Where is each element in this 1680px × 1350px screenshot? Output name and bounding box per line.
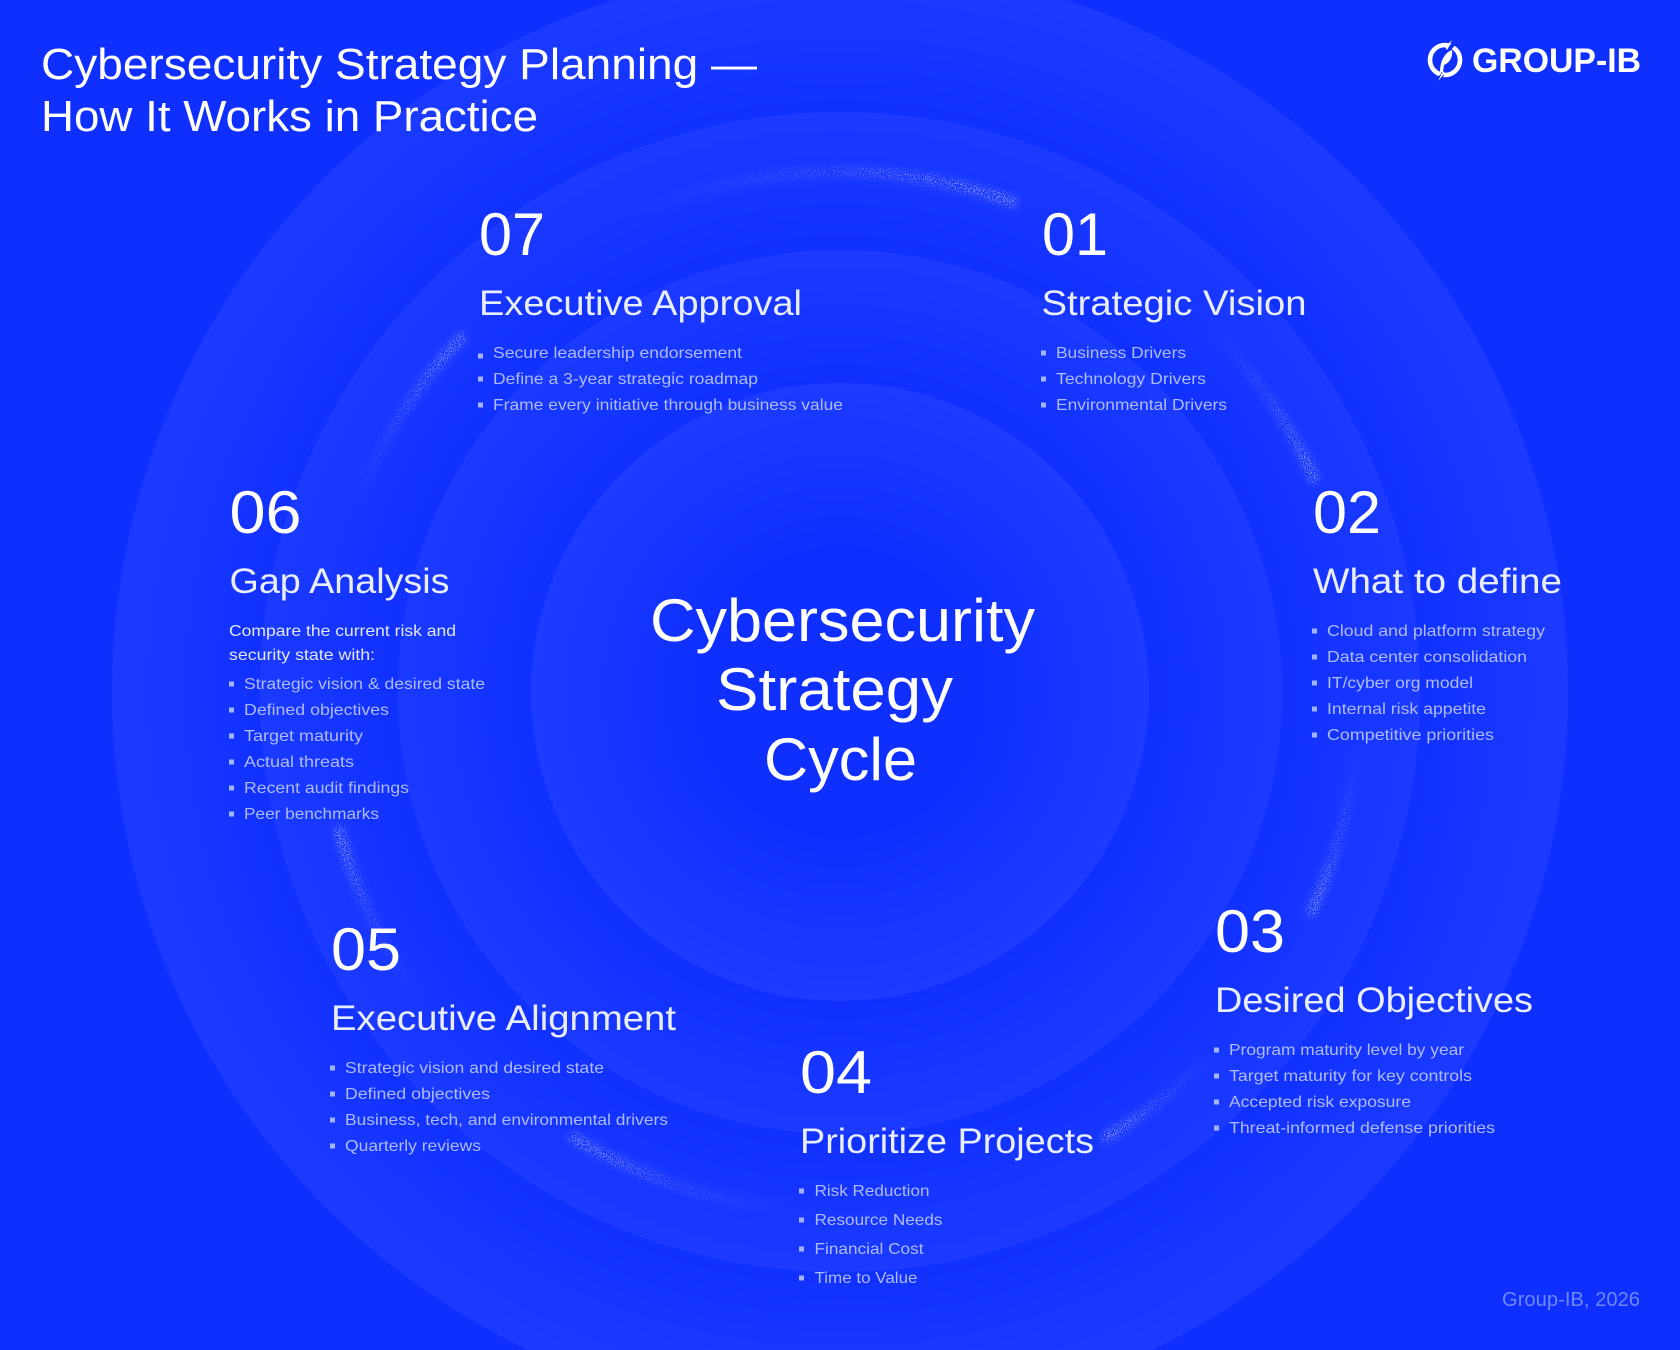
particle arcs of the cycle: [339, 172, 1358, 1210]
bullet list: Quarterly reviews: [345, 1138, 481, 1155]
step heading: Executive Approval: [479, 284, 802, 323]
bullet list: Strategic vision & desired state: [244, 676, 485, 693]
step number: 04: [800, 1039, 872, 1106]
panel: step 02: [1312, 479, 1562, 744]
arc: 03 to 04: [1107, 1050, 1216, 1137]
panel: step 04: [799, 1039, 1094, 1287]
step number: 03: [1215, 898, 1285, 965]
panel: step 06: [229, 479, 485, 823]
step heading: Gap Analysis: [230, 562, 450, 601]
bullet list: Frame every initiative through business value: [493, 397, 843, 414]
bullet list: Target maturity for key controls: [1229, 1068, 1472, 1085]
arc: 05 to 06: [339, 831, 424, 1004]
bullet list: Cloud and platform strategy: [1327, 623, 1545, 640]
step number: 02: [1313, 479, 1381, 546]
arc: 04 to 05: [574, 1138, 798, 1210]
step heading: Strategic Vision: [1042, 284, 1306, 323]
panel: step 05: [330, 916, 676, 1155]
bullet list: Resource Needs: [814, 1212, 942, 1229]
center label: [650, 587, 1035, 793]
step number: 06: [230, 479, 302, 546]
intro text: security state with:: [229, 647, 375, 664]
bullet list: Define a 3-year strategic roadmap: [493, 371, 758, 388]
bullet list: Secure leadership endorsement: [493, 345, 743, 362]
step number: 07: [479, 201, 545, 268]
bullet list: [478, 345, 843, 414]
arc: 01 to 02: [1202, 319, 1314, 478]
bullet list: Actual threats: [244, 754, 354, 771]
bullet list: Target maturity: [244, 728, 363, 745]
bullet list: Risk Reduction: [814, 1183, 930, 1200]
bullet list: Defined objectives: [244, 702, 389, 719]
bullet list: IT/cyber org model: [1327, 675, 1473, 692]
arc: 06 to 07: [352, 338, 461, 513]
bullet list: Internal risk appetite: [1327, 701, 1486, 718]
footer credit: Group-IB, 2026: [1502, 1289, 1640, 1311]
bullet list: Financial Cost: [814, 1241, 924, 1258]
bullet list: Business Drivers: [1056, 345, 1186, 362]
logo: Group-IB: [1430, 40, 1641, 84]
bullet list: Business, tech, and environmental drivers: [345, 1112, 668, 1129]
step number: 05: [331, 916, 401, 983]
bullet list: Technology Drivers: [1056, 371, 1206, 388]
intro text: Compare the current risk and: [229, 623, 456, 640]
bullet list: Accepted risk exposure: [1229, 1094, 1411, 1111]
center label: Strategy: [716, 656, 953, 723]
panel: step 03: [1214, 898, 1533, 1137]
bullet list: Defined objectives: [345, 1086, 490, 1103]
step heading: What to define: [1313, 562, 1562, 601]
bullet list: [1041, 345, 1227, 414]
bullet list: Competitive priorities: [1327, 727, 1494, 744]
bullet list: Strategic vision and desired state: [345, 1060, 604, 1077]
arc: 02 to 03: [1311, 739, 1358, 912]
step heading: Prioritize Projects: [800, 1122, 1094, 1161]
panel: step 01: [1041, 201, 1306, 414]
bullet list: Data center consolidation: [1327, 649, 1527, 666]
bullet list: [330, 1060, 668, 1155]
title: How It Works in Practice: [41, 92, 538, 141]
icon: logo mark: [1430, 40, 1460, 84]
step heading: Desired Objectives: [1215, 981, 1533, 1020]
bullet list: Time to Value: [814, 1270, 918, 1287]
bullet list: Environmental Drivers: [1056, 397, 1227, 414]
bullet list: Recent audit findings: [244, 780, 409, 797]
arc: 07 to 01: [618, 172, 1013, 221]
step heading: Executive Alignment: [331, 999, 676, 1038]
center label: Cybersecurity: [650, 587, 1035, 654]
logo wordmark: GROUP-IB: [1472, 42, 1641, 80]
step number: 01: [1042, 201, 1108, 268]
bullet list: Program maturity level by year: [1229, 1042, 1465, 1059]
bullet list: Threat-informed defense priorities: [1229, 1120, 1495, 1137]
bullet list: [1312, 623, 1545, 744]
bullet list: [799, 1183, 942, 1287]
bullet list: [1214, 1042, 1495, 1137]
center label: Cycle: [764, 726, 917, 793]
panel: step 07: [478, 201, 843, 414]
bullet list: Peer benchmarks: [244, 806, 379, 823]
bullet list: [229, 676, 485, 823]
title: Cybersecurity Strategy Planning —: [41, 40, 757, 89]
